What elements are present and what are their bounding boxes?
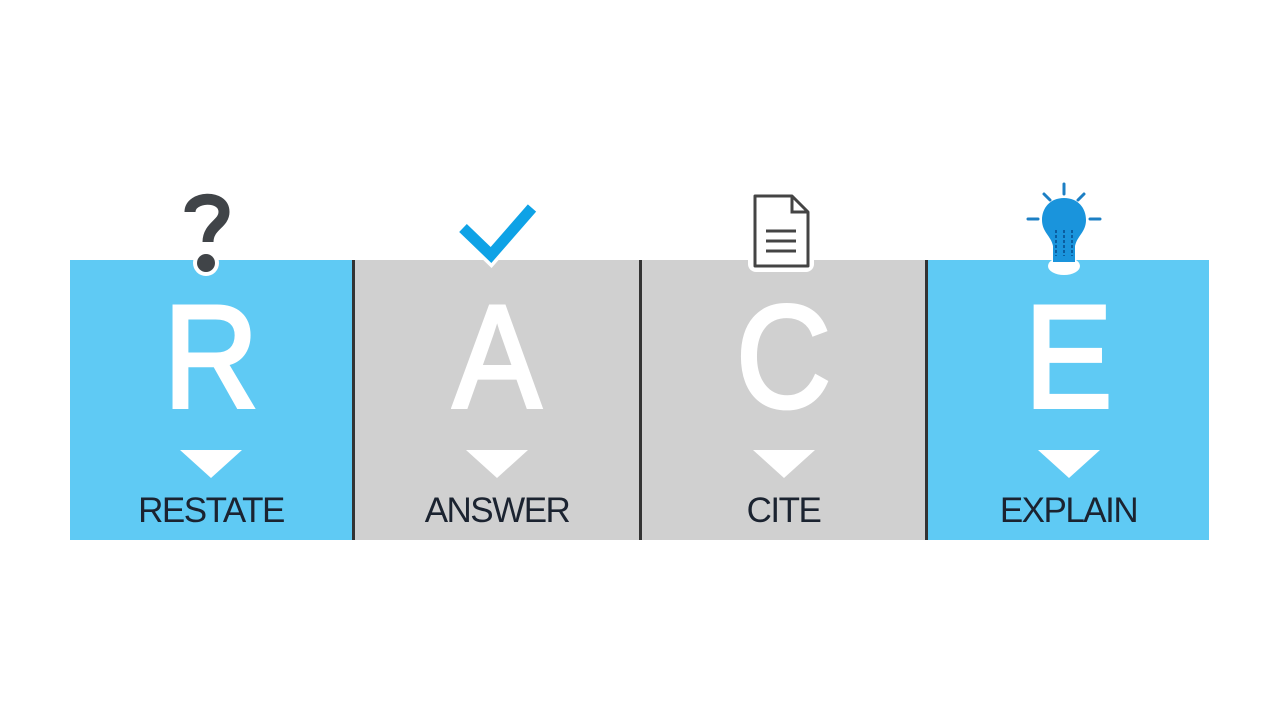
panel: answer bbox=[355, 260, 639, 540]
letter C: C bbox=[736, 275, 831, 438]
label restate: RESTATE bbox=[138, 491, 284, 530]
label explain: EXPLAIN bbox=[1000, 491, 1137, 530]
arrow E bbox=[1038, 450, 1100, 478]
icon: lightbulb bbox=[1026, 182, 1102, 275]
label cite: CITE bbox=[747, 491, 820, 530]
panel: cite bbox=[642, 260, 925, 540]
panel: restate bbox=[70, 260, 352, 540]
icon: document bbox=[748, 194, 814, 272]
arrow C bbox=[752, 450, 814, 478]
panel: explain bbox=[928, 260, 1209, 540]
letter A: A bbox=[453, 275, 541, 438]
label answer: ANSWER bbox=[425, 491, 569, 530]
arrow R bbox=[180, 450, 242, 478]
letter R: R bbox=[164, 275, 258, 438]
icon: checkmark bbox=[459, 204, 536, 268]
arrow A bbox=[466, 450, 528, 478]
icon: question mark bbox=[184, 194, 230, 276]
letter E: E bbox=[1025, 275, 1112, 438]
